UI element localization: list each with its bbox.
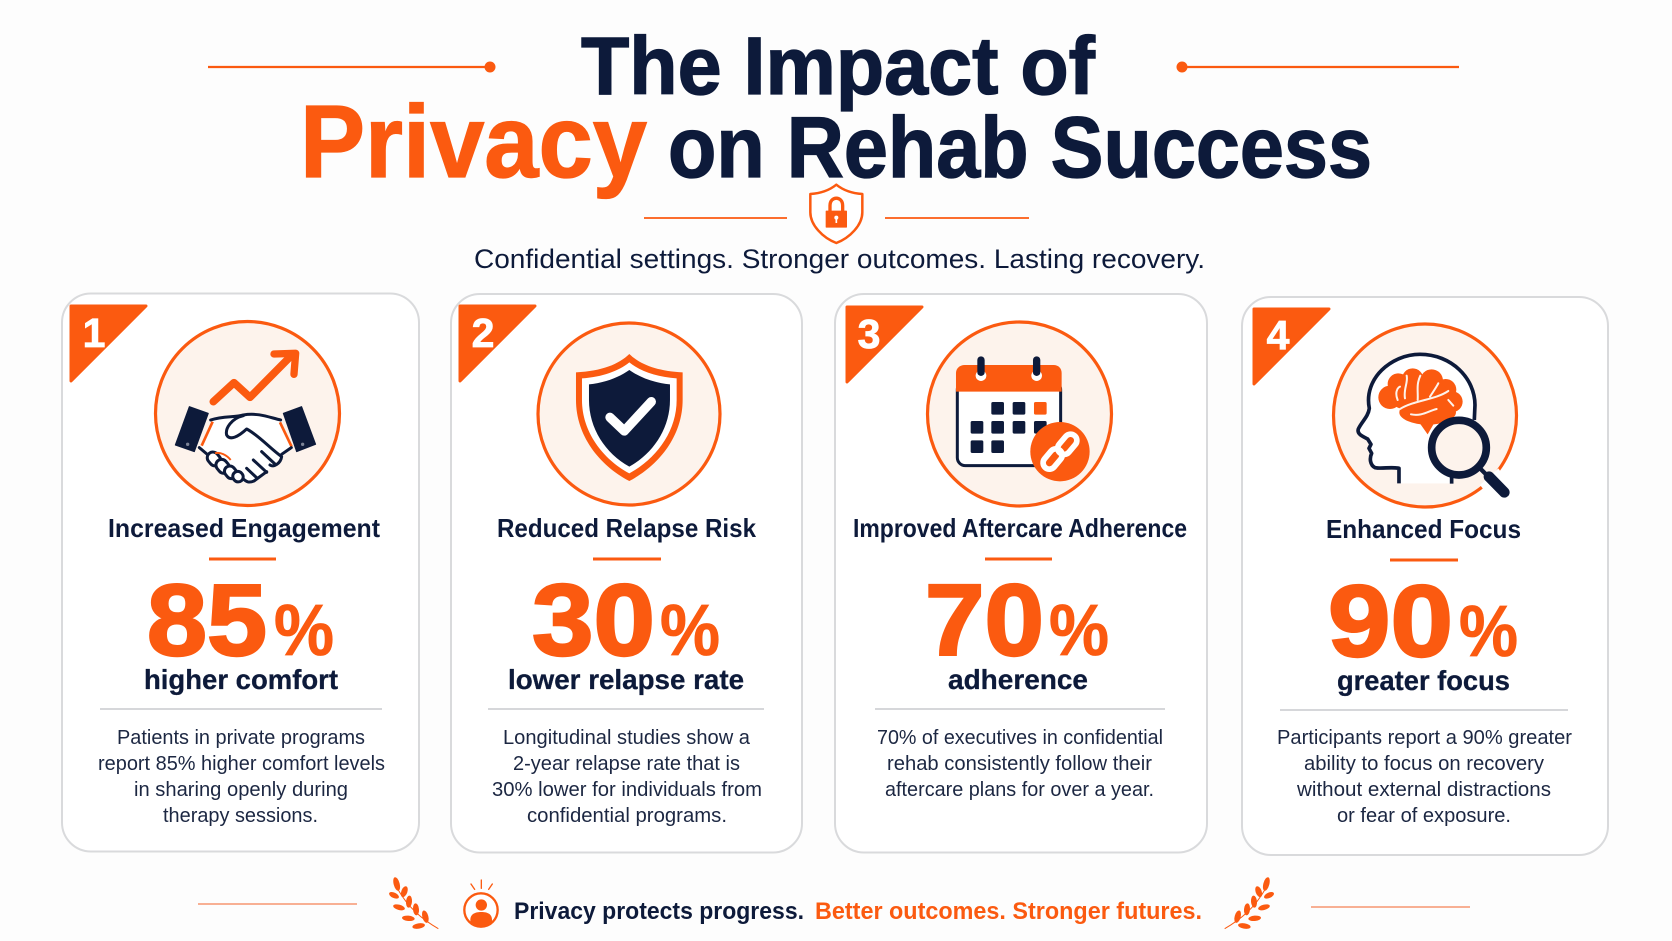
title: [300, 21, 1372, 199]
description 1: Patients in private programs: [117, 726, 365, 749]
icon: handshake and rising arrow: [156, 322, 340, 506]
description 3: aftercare plans for over a year.: [885, 778, 1154, 801]
description 3: 70% of executives in confidential: [877, 726, 1163, 749]
stat 85%: 85: [147, 565, 267, 677]
stat 85%: [147, 565, 334, 677]
description 2: [492, 726, 762, 827]
description 1: therapy sessions.: [163, 804, 318, 827]
number badge 1: [71, 306, 146, 381]
panel: enhanced focus: [1242, 297, 1608, 855]
stat 90%: 90: [1328, 566, 1453, 678]
description 2: 30% lower for individuals from: [492, 778, 762, 801]
card background 3: [835, 294, 1207, 852]
card background 4: [1242, 297, 1608, 855]
icon: shield with lock: [810, 185, 862, 243]
subtitle: Confidential settings. Stronger outcomes. Lasting recovery.: [474, 244, 1205, 274]
stat 90%: %: [1459, 592, 1518, 672]
number badge 3: [847, 307, 922, 382]
icon: person in circle: [464, 880, 498, 927]
panel: reduced relapse risk: [451, 294, 802, 852]
description 1: in sharing openly during: [134, 778, 348, 801]
icon: laurel right: [1225, 876, 1275, 930]
description 4: Participants report a 90% greater: [1277, 726, 1572, 749]
number badge 4: 4: [1267, 312, 1290, 358]
title accent line left: [208, 62, 496, 72]
stat 70%: 70: [925, 565, 1044, 677]
heading 4: Enhanced Focus: [1326, 514, 1521, 544]
stat 30%: %: [660, 591, 720, 671]
description 2: 2-year relapse rate that is: [513, 752, 740, 775]
description 2: Longitudinal studies show a: [503, 726, 751, 749]
stat label 4: greater focus: [1337, 665, 1510, 696]
stat 30%: [532, 565, 720, 677]
stat label 2: lower relapse rate: [508, 664, 744, 695]
panel: increased engagement: [62, 294, 419, 852]
icon: calendar with chain link: [928, 322, 1112, 506]
icon: shield with check: [538, 323, 720, 505]
heading 1: Increased Engagement: [108, 513, 380, 543]
number badge 4: [1254, 309, 1329, 384]
footer tagline: [514, 898, 1202, 925]
description 4: without external distractions: [1296, 778, 1551, 801]
title: on Rehab Success: [668, 100, 1372, 196]
stat 85%: %: [274, 591, 334, 671]
title: The Impact of: [581, 21, 1096, 112]
stat label 3: adherence: [948, 664, 1088, 695]
icon: laurel left: [388, 876, 438, 930]
heading 2: Reduced Relapse Risk: [497, 513, 757, 543]
card background 2: [451, 294, 802, 852]
stat 30%: 30: [532, 565, 655, 677]
description 1: [98, 726, 385, 827]
number badge 2: 2: [472, 310, 494, 356]
description 4: [1277, 726, 1572, 827]
stat label 1: higher comfort: [144, 664, 338, 695]
description 4: ability to focus on recovery: [1304, 752, 1545, 775]
description 3: [877, 726, 1163, 801]
panel: improved aftercare adherence: [835, 294, 1207, 852]
stat 70%: %: [1049, 591, 1109, 671]
number badge 2: [460, 306, 535, 381]
description 3: rehab consistently follow their: [887, 752, 1152, 775]
description 4: or fear of exposure.: [1337, 804, 1511, 827]
description 1: report 85% higher comfort levels: [98, 752, 385, 775]
footer tagline: Better outcomes. Stronger futures.: [815, 898, 1202, 925]
number badge 1: 1: [83, 310, 105, 356]
icon: head with brain and magnifier: [1334, 324, 1516, 507]
card background 1: [62, 294, 419, 852]
number badge 3: 3: [858, 311, 880, 357]
title accent line right: [1176, 62, 1459, 72]
heading 3: Improved Aftercare Adherence: [853, 513, 1187, 543]
stat 70%: [925, 565, 1109, 677]
stat 90%: [1328, 566, 1518, 678]
title: Privacy: [300, 84, 647, 199]
footer tagline: Privacy protects progress.: [514, 898, 804, 925]
description 2: confidential programs.: [527, 804, 727, 827]
